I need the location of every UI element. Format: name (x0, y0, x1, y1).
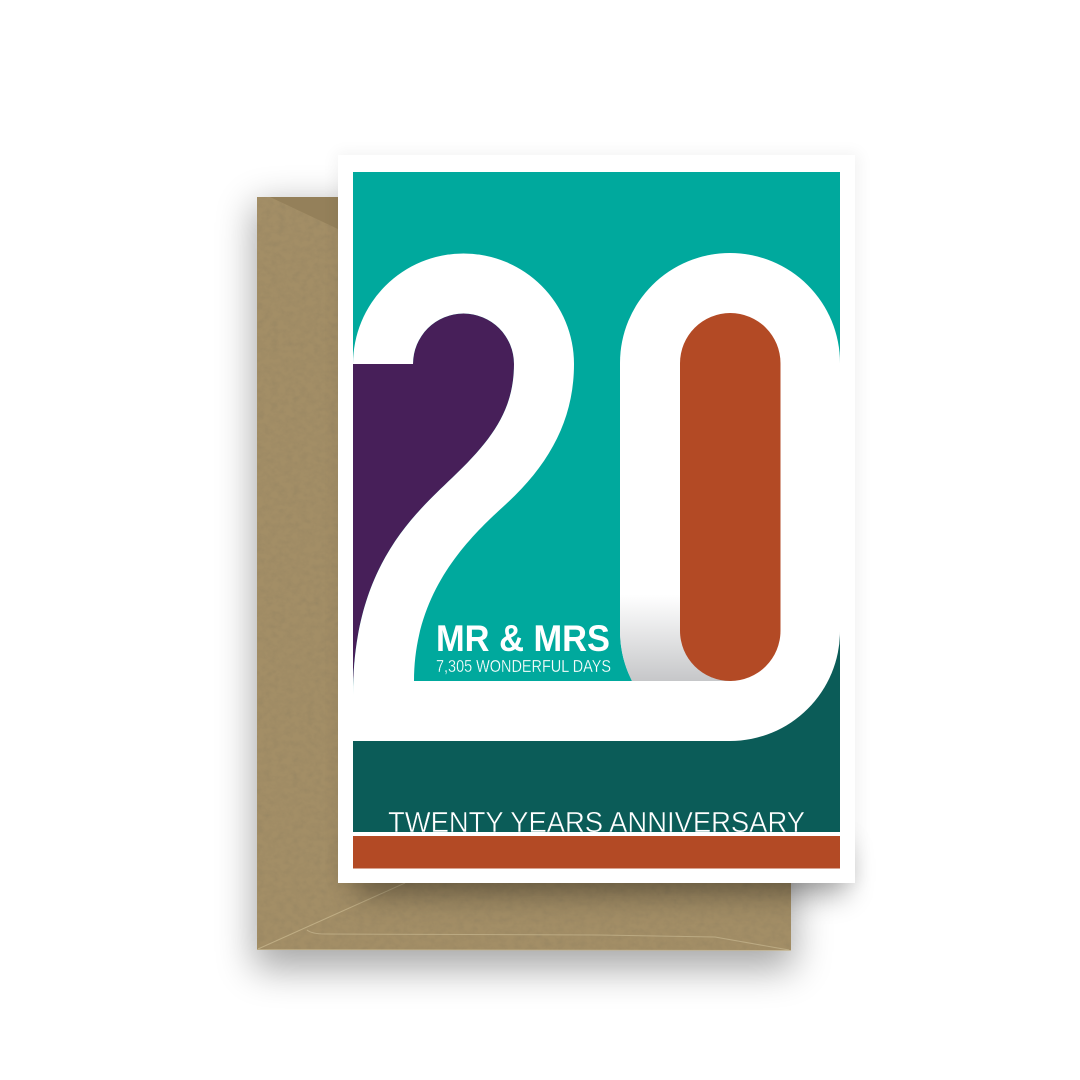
card drop shadow (356, 845, 846, 895)
purple counter of the two (353, 314, 514, 695)
orange bottom band (353, 836, 840, 868)
orange counter of the zero (680, 313, 780, 681)
white divider line (353, 832, 840, 836)
heading: mr and mrs: MR & MRS (436, 618, 610, 659)
teal background (353, 172, 840, 741)
envelope bottom flap creases (257, 883, 791, 950)
envelope top flap fold (270, 197, 338, 229)
card artwork panel (353, 172, 840, 868)
numeral 0 fold shading (620, 595, 732, 681)
dark teal band (353, 631, 840, 832)
numeral 0 (620, 253, 840, 741)
white card (338, 155, 855, 883)
faint card halo (336, 153, 859, 885)
subheading: wonderful days: 7,305 WONDERFUL DAYS (436, 656, 611, 676)
numeral 2 (353, 254, 730, 741)
envelope shadow (254, 205, 794, 969)
tagline: twenty years anniversary: TWENTY YEARS ANNIVERSARY (388, 807, 805, 839)
kraft envelope (257, 197, 791, 950)
